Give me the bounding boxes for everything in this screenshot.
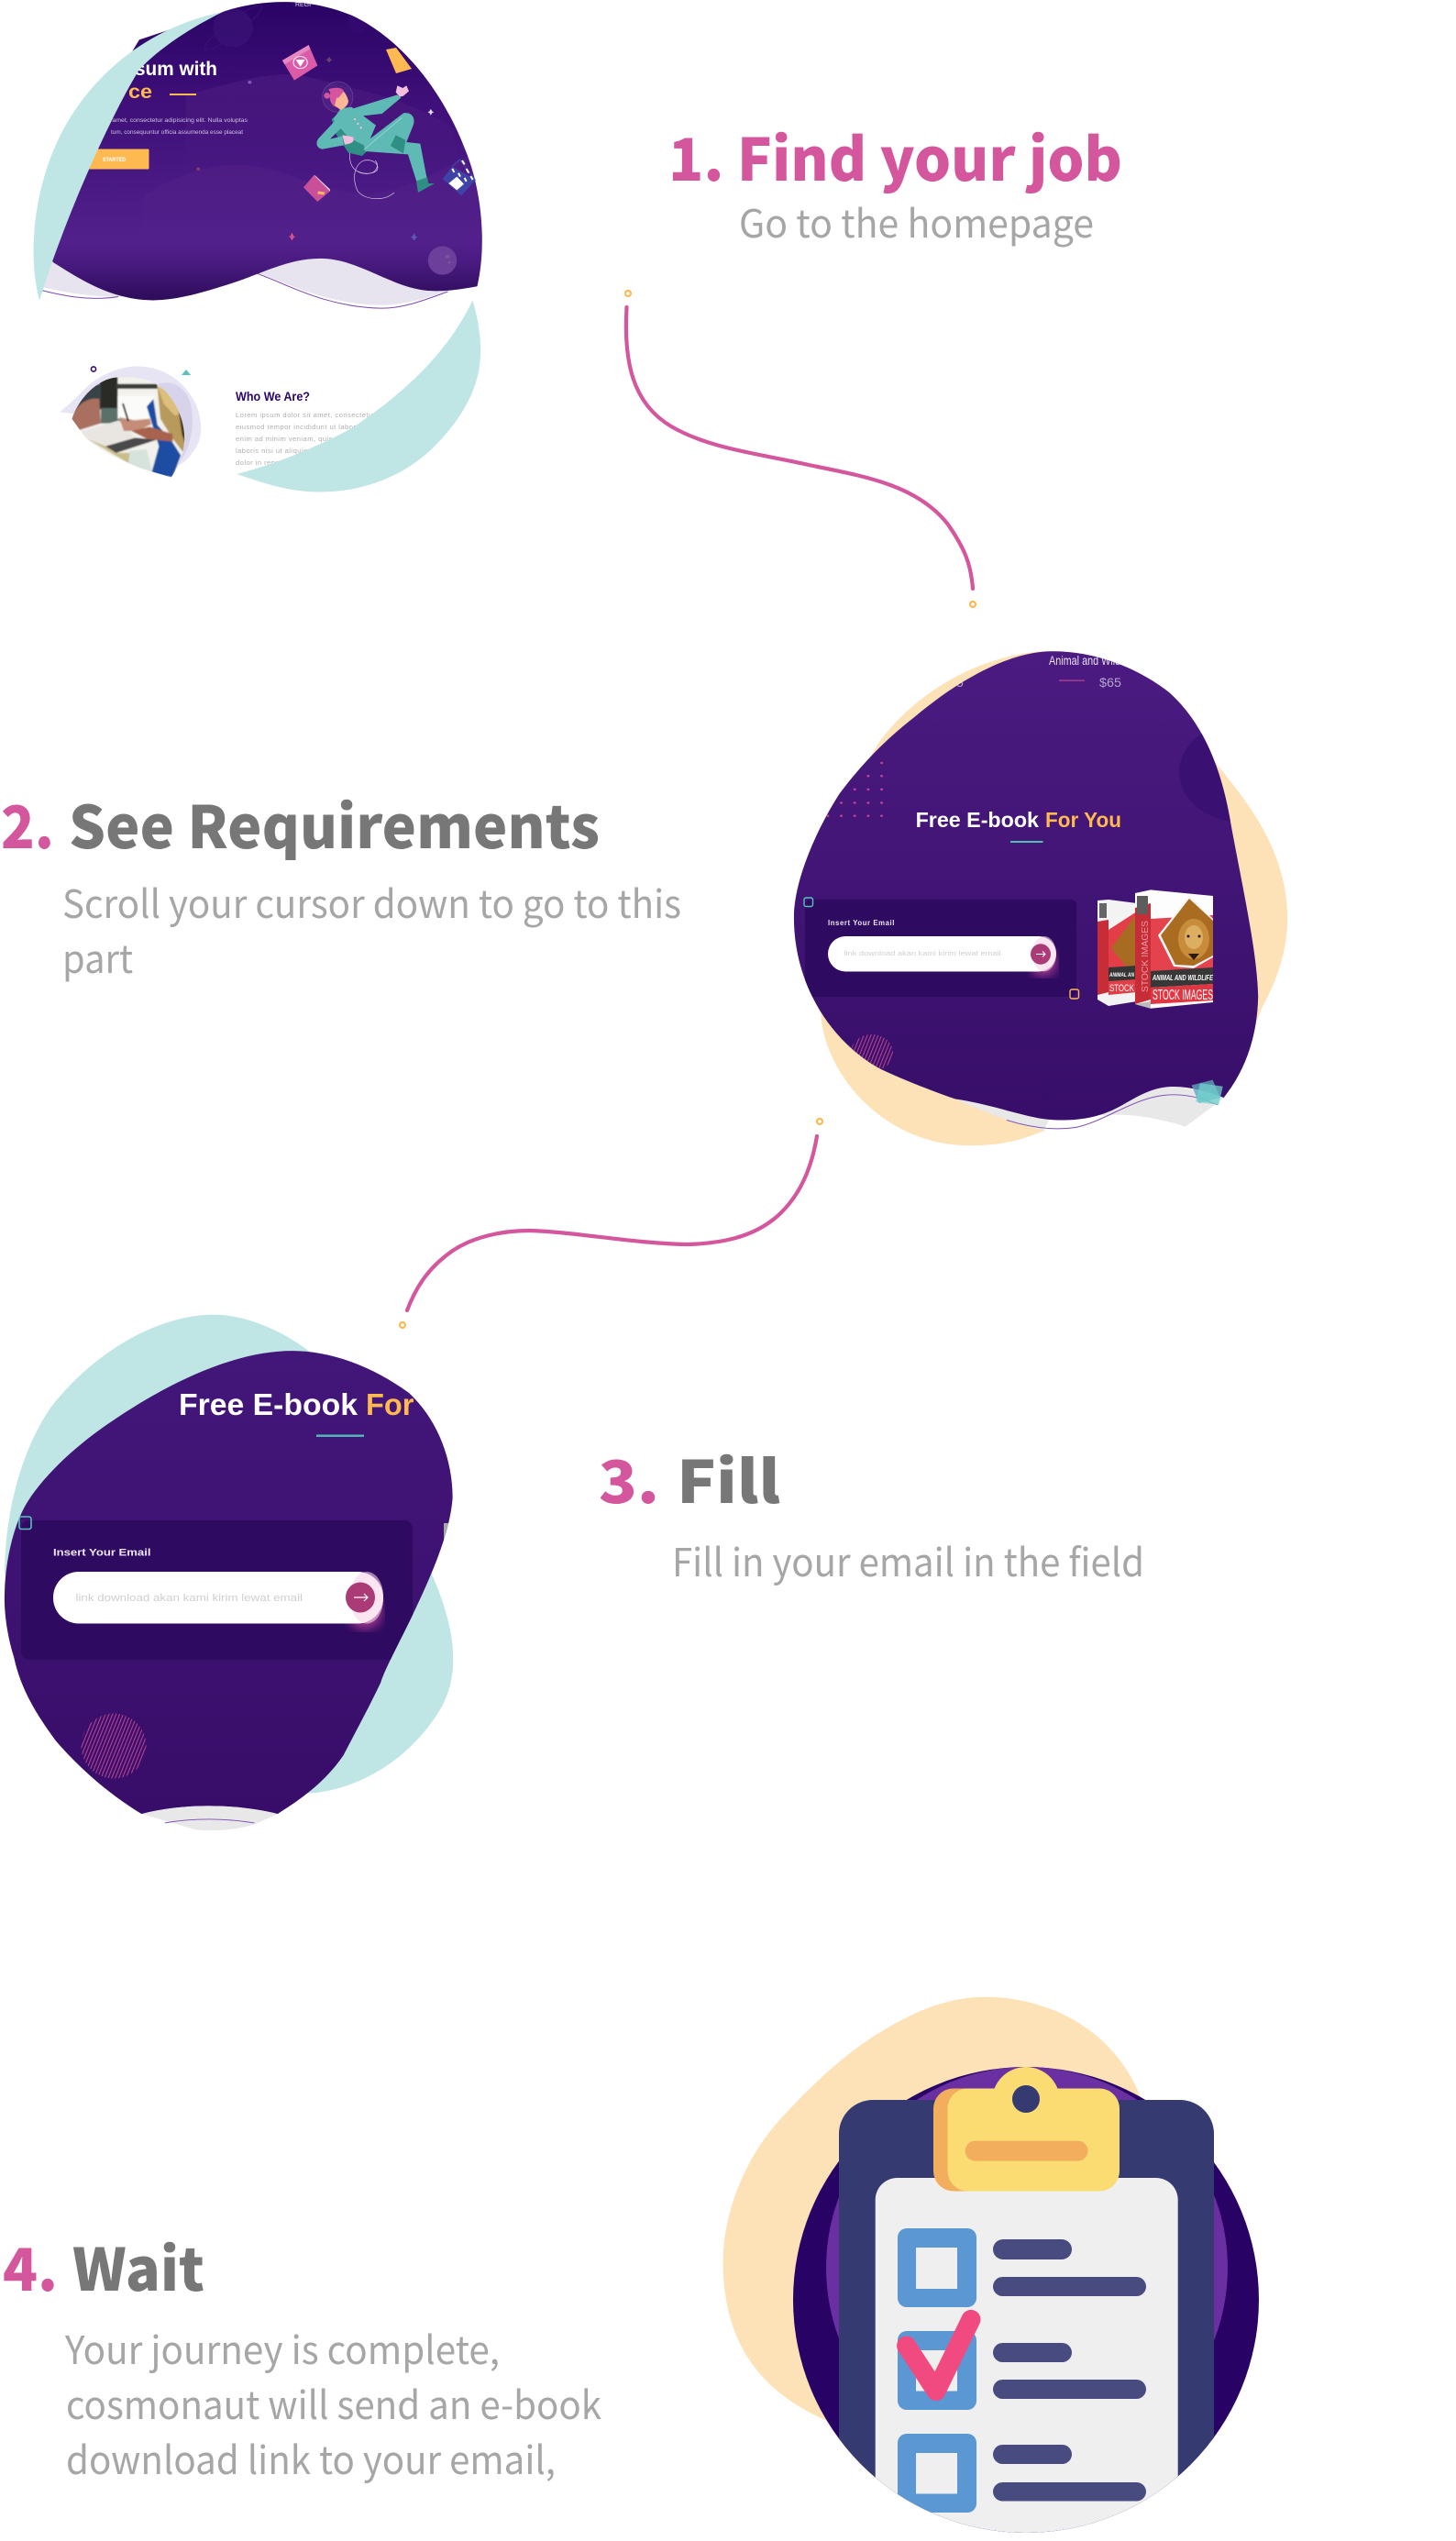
hero headline <box>128 59 217 103</box>
section title: For You <box>1045 808 1121 832</box>
heading: step 4: Wait <box>72 2224 204 2308</box>
description: step 4 <box>64 2320 601 2486</box>
description: step 3: Fill in your email in the field <box>672 1532 1144 1588</box>
clip <box>933 2067 1120 2192</box>
arrow: connector 1 to 2 <box>625 291 976 607</box>
description: step 2 <box>62 874 681 985</box>
triangle marker <box>182 370 191 375</box>
hero background hills and planets <box>139 1 483 275</box>
teal underline <box>316 1434 364 1437</box>
purple blob with form content <box>794 651 1300 1120</box>
checkbox 3 <box>898 2434 976 2513</box>
section title: Free E-book <box>916 808 1039 832</box>
lavender shapes behind photo <box>60 366 201 468</box>
email label: Insert Your Email <box>828 919 895 927</box>
lorem paragraph: enim ad minim veniam, quis nostrud <box>236 435 361 443</box>
hero paragraph: tum, consequuntur officia assumenda esse placeat <box>111 129 243 136</box>
corner marker <box>19 1517 31 1530</box>
e-book box back: STOCK <box>1109 983 1134 994</box>
e-book box front: STOCK IMAGES <box>1141 921 1151 992</box>
hero button: STARTED <box>103 158 127 163</box>
heading: step 2 <box>1 781 681 985</box>
lavender wave under hero <box>42 238 448 308</box>
purple blob: Free E-book <box>179 1387 358 1421</box>
purple blob with form content: Animal and Wildlife <box>1049 653 1133 668</box>
who we are section <box>60 366 382 480</box>
email input pill <box>53 1572 383 1629</box>
hero paragraph <box>107 117 248 136</box>
hero purple blob <box>47 2 482 300</box>
purple blob: For You <box>366 1387 476 1421</box>
hatched circle <box>81 1713 147 1779</box>
ring marker <box>91 367 96 371</box>
clipped clipboard <box>826 2067 1228 2541</box>
heading: who we are: Who We Are? <box>236 389 310 403</box>
lorem paragraph <box>236 411 382 467</box>
checkbox 2 <box>898 2331 976 2410</box>
teal blob bottom right <box>237 300 480 492</box>
lorem paragraph: dolor in reprehen <box>236 458 295 467</box>
hero paragraph: it amet, consectetur adipisicing elit. Nulla voluptas <box>107 117 248 124</box>
clipboard board <box>839 2100 1214 2541</box>
heading: step 1: 1. Find your job <box>668 114 1122 198</box>
hero button <box>83 149 149 169</box>
nav text: REGI <box>295 3 311 8</box>
panel: step 2 e-book preview <box>794 651 1300 1145</box>
astronaut illustration <box>316 82 435 199</box>
icon: film clapper <box>443 160 476 195</box>
corner markers <box>804 898 1078 999</box>
inner purple circle <box>826 2067 1228 2340</box>
e-book box back: ANIMAL AN <box>1109 973 1135 978</box>
section title <box>916 808 1121 843</box>
lorem paragraph: eiusmod tempor incididunt ut labore <box>236 423 360 431</box>
lorem paragraph: Lorem ipsum dolor sit amet, consectetur a <box>236 411 382 419</box>
heading: step 2: 2. <box>1 781 54 866</box>
heading: step 4: 4. <box>3 2224 58 2308</box>
panel: step 1 website preview <box>34 1 483 492</box>
teal blob top left <box>34 12 223 300</box>
heading: step 4 <box>3 2224 601 2486</box>
office photo <box>72 378 185 477</box>
teal blob <box>5 1315 453 1794</box>
description: step 4: Your journey is complete, <box>64 2320 500 2376</box>
purple line and teal squares <box>1007 1080 1223 1129</box>
lorem paragraph: laboris nisi ut aliquip ex <box>236 447 318 455</box>
e-book box front: ANIMAL AND WILDLIFE <box>1152 974 1213 982</box>
heading: step 3 <box>599 1436 1144 1588</box>
dark purple circle <box>793 2067 1259 2533</box>
heading: step 3: 3. <box>599 1436 659 1520</box>
paper sheet <box>876 2178 1178 2541</box>
checkbox 1 <box>898 2228 976 2307</box>
panel: step 3 email form preview <box>5 1315 476 1830</box>
grey wave <box>955 1077 1225 1131</box>
description: step 2: Scroll your cursor down to go to this <box>62 874 681 930</box>
description: step 1: Go to the homepage <box>739 193 1094 249</box>
purple blob <box>5 1351 476 1814</box>
heading: step 2: See Requirements <box>69 781 600 866</box>
arrow: connector 2 to 3 <box>400 1119 822 1328</box>
price line: $65 <box>1099 675 1121 690</box>
heading: step 1 <box>668 114 1122 249</box>
peach blob <box>821 651 1287 1145</box>
icon: book <box>303 175 330 202</box>
e-book box front <box>1135 889 1213 1009</box>
panel: step 4 clipboard illustration <box>723 1997 1259 2541</box>
heading: step 3: Fill <box>677 1436 780 1520</box>
check mark <box>907 2319 971 2392</box>
description: step 4: cosmonaut will send an e-book <box>66 2375 601 2431</box>
hero headline: sum with <box>135 59 217 80</box>
list lines <box>993 2239 1146 2502</box>
pink dot grid <box>826 762 883 817</box>
icon: orange tag <box>386 48 412 73</box>
description: step 4: download link to your email, <box>66 2430 556 2486</box>
description: step 2: part <box>62 929 133 985</box>
e-book box front: STOCK IMAGES <box>1153 988 1213 1003</box>
email input pill: link download akan kami kirim lewat email <box>844 951 1001 957</box>
email label: Insert Your Email <box>53 1548 150 1559</box>
price line <box>1059 675 1121 690</box>
peach blob <box>723 1997 1141 2421</box>
purple blob with form content: 5 <box>956 675 964 690</box>
bottom wave <box>141 1806 278 1830</box>
icon: film ticket <box>282 45 317 81</box>
e-book box back <box>1098 900 1137 1006</box>
email input pill: link download akan kami kirim lewat email <box>75 1593 303 1604</box>
hero headline: ce <box>128 82 152 103</box>
email input pill <box>828 936 1056 976</box>
